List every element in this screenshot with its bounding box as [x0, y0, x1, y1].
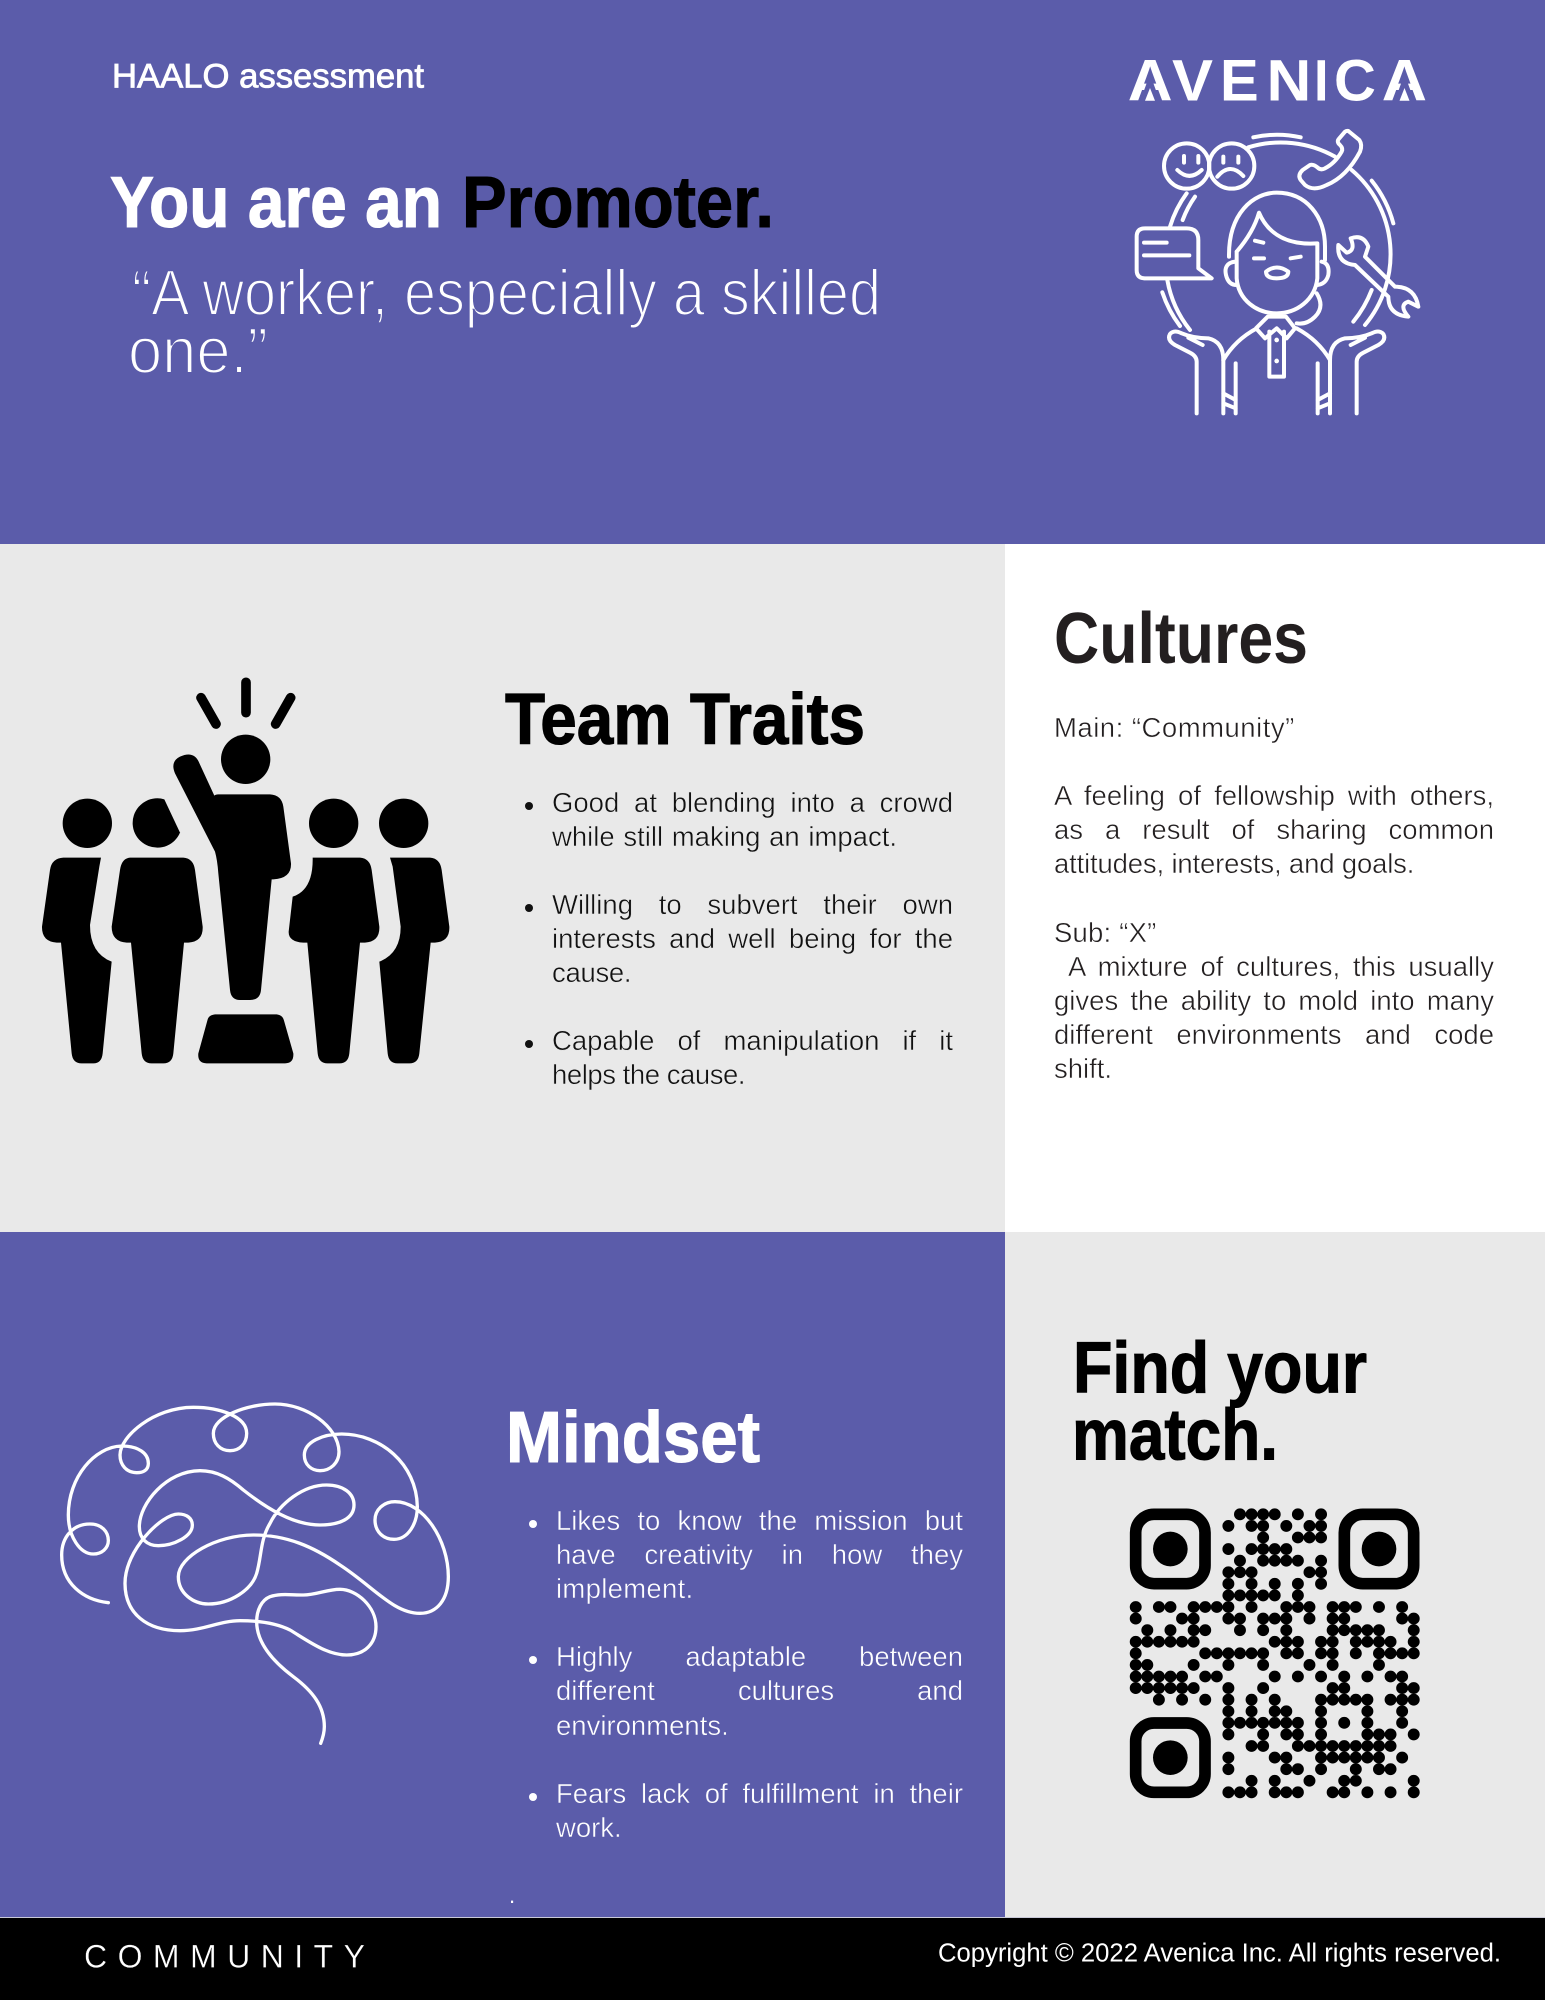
icon part: phone — [1299, 131, 1361, 188]
heading: Find your match: match. — [1072, 1396, 1278, 1476]
logo: AVENICA: V — [1172, 48, 1213, 113]
text: culture descriptions: Sub: “X” — [1054, 917, 1156, 948]
logo: AVENICA: C — [1334, 49, 1376, 114]
text: culture descriptions: attitudes, interests, and goals. — [1054, 848, 1414, 879]
list: team traits: while still making an impact. — [552, 821, 897, 852]
title: You are an Promoter: Promoter. — [462, 163, 774, 243]
list: mindset: Highly adaptable between — [556, 1641, 963, 1672]
text: culture descriptions — [1054, 712, 1494, 1084]
list: team traits: cause. — [552, 957, 631, 988]
panel: find your match — [1005, 1232, 1545, 1917]
quote: definition: “A worker, especially a skilled — [132, 256, 881, 329]
panel: team traits — [0, 544, 1005, 1232]
text: culture descriptions: A feeling of fellowship with others, — [1054, 780, 1494, 811]
icon part: right hand — [1318, 331, 1384, 413]
icon part: head — [1226, 193, 1329, 324]
list: mindset: implement. — [556, 1573, 694, 1604]
heading: Find your match: Find your — [1073, 1329, 1367, 1409]
label: HAALO assessment: HAALO assessment — [112, 58, 425, 96]
logo: AVENICA: A — [1128, 49, 1173, 113]
qr finder patterns — [1136, 1514, 1414, 1792]
list: mindset: environments. — [556, 1710, 729, 1741]
list: team traits: interests and well being for the — [552, 923, 953, 954]
text: culture descriptions: different environments and code — [1054, 1019, 1494, 1050]
list: mindset: Likes to know the mission but — [556, 1505, 963, 1536]
list: team traits: Willing to subvert their own — [552, 889, 953, 920]
list: mindset: Fears lack of fulfillment in their — [556, 1778, 963, 1809]
qr code — [1130, 1508, 1420, 1798]
icon: line-art brain — [60, 1402, 450, 1745]
footer label: COMMUNITY: COMMUNITY — [84, 1938, 365, 1974]
heading: Find your match — [1072, 1329, 1367, 1476]
icon part: ring arcs — [1162, 135, 1393, 330]
title: You are an Promoter — [110, 163, 774, 243]
quote: definition — [128, 256, 881, 387]
text: culture descriptions: Main: “Community” — [1054, 712, 1295, 743]
list: mindset: different cultures and — [556, 1675, 963, 1706]
list: team traits: Capable of manipulation if it — [552, 1025, 953, 1056]
icon: crowd with standout person — [42, 678, 450, 1064]
footer copyright: Copyright © 2022 Avenica Inc. All rights reserved. — [938, 1940, 1501, 1968]
logo: AVENICA — [1128, 48, 1427, 114]
heading: Cultures: Cultures — [1054, 599, 1308, 679]
icon part: wrench — [1338, 237, 1418, 317]
logo: AVENICA: I — [1314, 48, 1329, 113]
panel: mindset — [0, 1232, 1005, 1917]
list: mindset: work. — [556, 1812, 622, 1843]
logo: AVENICA: E — [1220, 49, 1259, 114]
title: You are an Promoter: You are an — [110, 163, 442, 243]
logo: AVENICA: N — [1266, 49, 1311, 113]
footer bar — [0, 1917, 1545, 2000]
text: culture descriptions: gives the ability to mold into many — [1054, 985, 1494, 1016]
list: team traits: Good at blending into a crowd — [552, 786, 953, 818]
icon: support worker — [1134, 128, 1420, 416]
icon part: smiley faces — [1164, 143, 1254, 189]
icon part: collar and shirt — [1223, 317, 1330, 377]
quote: definition: one.” — [128, 314, 268, 387]
text: culture descriptions: shift. — [1054, 1053, 1112, 1084]
list: team traits: helps the cause. — [552, 1059, 745, 1090]
heading: Mindset: Mindset — [506, 1398, 760, 1478]
list: mindset — [529, 1505, 963, 1843]
logo: AVENICA: A — [1382, 48, 1427, 113]
text: stray period: . — [509, 1883, 515, 1908]
panel: header — [0, 0, 1545, 544]
icon part: chat bubble — [1137, 228, 1212, 278]
icon part: left hand — [1169, 331, 1236, 413]
text: culture descriptions: as a result of sharing common — [1054, 814, 1494, 845]
qr data dots — [1136, 1514, 1414, 1792]
list: team traits — [525, 786, 953, 1090]
panel: cultures — [1005, 544, 1545, 1232]
list: mindset: have creativity in how they — [556, 1539, 963, 1570]
heading: Team Traits: Team Traits — [505, 680, 865, 760]
text: culture descriptions: A mixture of cultures, this usually — [1068, 951, 1494, 982]
